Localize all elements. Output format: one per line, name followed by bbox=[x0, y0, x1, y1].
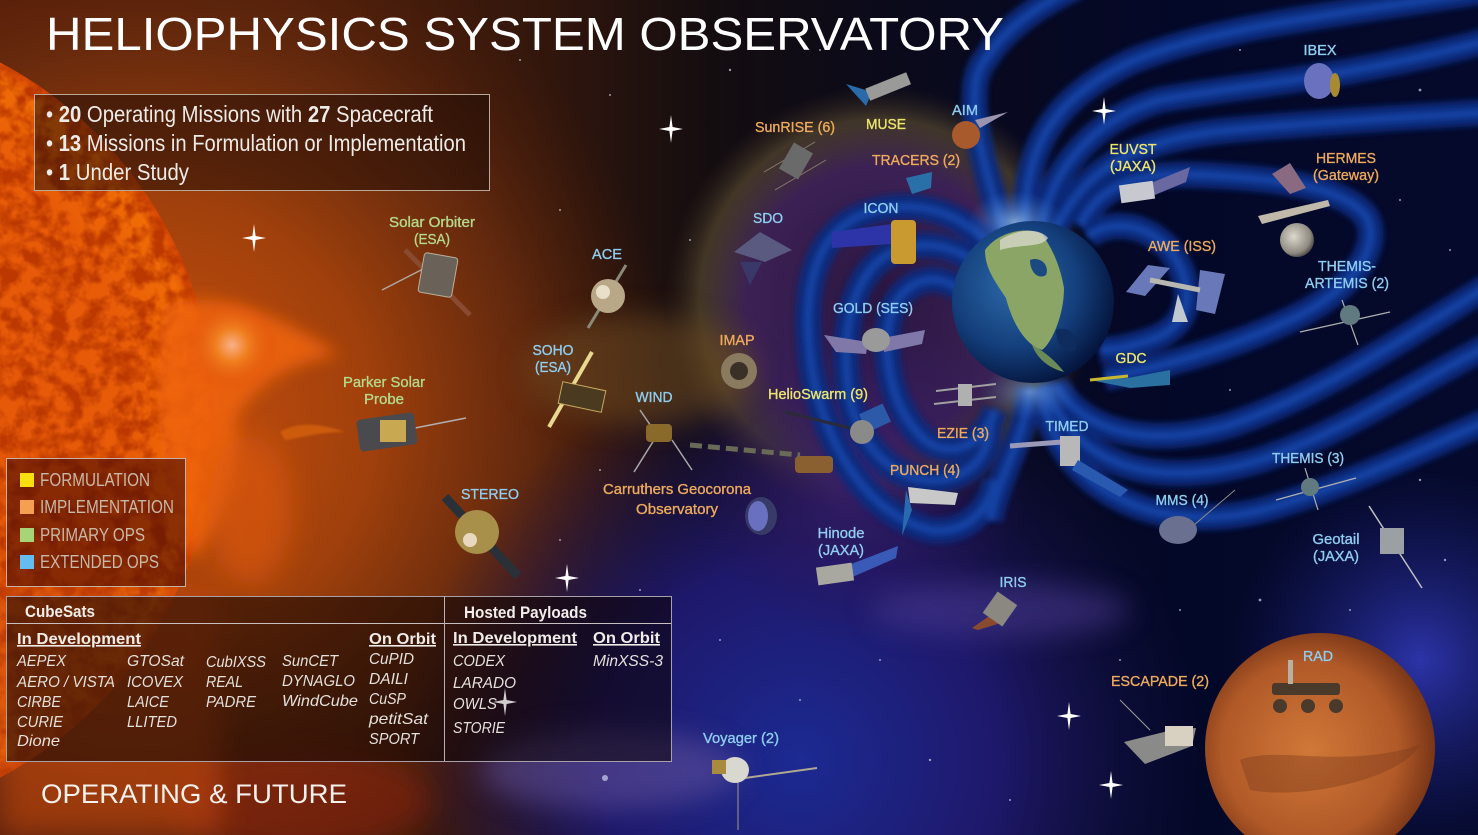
list: hosted in development: CODEX bbox=[453, 653, 506, 670]
mars bbox=[1205, 633, 1435, 835]
label: THEMIS-ARTEMIS: ARTEMIS (2) bbox=[1305, 275, 1389, 292]
label: THEMIS-ARTEMIS: THEMIS- bbox=[1318, 258, 1376, 275]
list: cubesats on orbit: petitSat bbox=[368, 711, 429, 728]
list: cubesats column 2: LLITED bbox=[127, 714, 177, 731]
label: ESCAPADE: ESCAPADE (2) bbox=[1111, 673, 1209, 690]
legend: formulation: FORMULATION bbox=[40, 470, 150, 490]
label: Geotail bbox=[1312, 531, 1360, 565]
sun with surface texture and flare bbox=[0, 15, 345, 835]
list: hosted in development bbox=[453, 653, 516, 737]
stars bbox=[242, 49, 1451, 801]
spacecraft: Parker Solar Probe bbox=[356, 412, 466, 452]
panel: status legend bbox=[6, 458, 186, 586]
spacecraft: SunRISE bbox=[764, 142, 826, 190]
label: EUVST: EUVST bbox=[1110, 141, 1156, 158]
spacecraft: Solar Orbiter bbox=[382, 250, 470, 315]
label: EUVST: (JAXA) bbox=[1110, 158, 1156, 175]
list: cubesats on orbit: SPORT bbox=[369, 731, 420, 748]
magnetosphere field lines bbox=[808, 0, 1478, 531]
list: cubesats on orbit bbox=[368, 651, 429, 748]
legend: extended ops: EXTENDED OPS bbox=[40, 552, 159, 572]
panel: cubesats and hosted payloads table bbox=[6, 596, 672, 762]
spacecraft: WIND bbox=[634, 410, 692, 472]
label: TIMED: TIMED bbox=[1046, 418, 1089, 435]
aurora glow at earth poles bbox=[967, 190, 1080, 420]
spacecraft: Hinode bbox=[816, 546, 898, 585]
panel: mission counts bbox=[34, 94, 490, 190]
heading: cubesats on orbit: On Orbit bbox=[369, 631, 437, 648]
list: hosted in development: STORIE bbox=[453, 720, 505, 737]
label: IMAP: IMAP bbox=[720, 332, 754, 349]
label: Geotail: (JAXA) bbox=[1313, 548, 1359, 565]
label: Carruthers Geocorona Observatory bbox=[603, 481, 752, 518]
list: cubesats on orbit: DAILI bbox=[369, 671, 409, 688]
label: Parker Solar Probe bbox=[343, 374, 425, 408]
list: cubesats column 3: PADRE bbox=[206, 694, 256, 711]
list: cubesats column 4: WindCube bbox=[282, 693, 358, 710]
label: Parker Solar Probe: Parker Solar bbox=[343, 374, 425, 391]
spacecraft: IMAP bbox=[721, 353, 757, 389]
spacecraft: THEMIS-ARTEMIS bbox=[1300, 300, 1390, 345]
label: SOHO: (ESA) bbox=[535, 359, 571, 376]
spacecraft: STEREO bbox=[445, 497, 518, 576]
spacecraft: Voyager bbox=[712, 757, 817, 830]
spacecraft: TIMED bbox=[1010, 436, 1128, 497]
title: HELIOPHYSICS SYSTEM OBSERVATORY bbox=[46, 8, 1004, 60]
spacecraft: MUSE bbox=[846, 72, 911, 106]
label: HERMES: HERMES bbox=[1316, 150, 1376, 167]
list: hosted on orbit: MinXSS-3 bbox=[593, 653, 663, 670]
label: EZIE: EZIE (3) bbox=[937, 425, 989, 442]
label: THEMIS-ARTEMIS bbox=[1305, 258, 1389, 292]
spacecraft: IRIS bbox=[972, 591, 1017, 630]
label: HERMES bbox=[1313, 150, 1379, 184]
label: AIM: AIM bbox=[952, 102, 978, 119]
label: IRIS: IRIS bbox=[1000, 574, 1026, 591]
list: hosted in development: OWLS bbox=[453, 696, 497, 713]
spacecraft: GOLD bbox=[824, 328, 925, 354]
label: AWE: AWE (ISS) bbox=[1148, 238, 1216, 255]
label: Carruthers Geocorona Observatory: Observatory bbox=[636, 501, 718, 518]
spacecraft: MMS bbox=[1159, 490, 1235, 544]
label: Carruthers Geocorona Observatory: Carruthers Geocorona bbox=[603, 481, 752, 498]
text: formulation missions: • 13 Missions in Formulation or Implementation bbox=[46, 130, 466, 156]
label: PUNCH: PUNCH (4) bbox=[890, 462, 960, 479]
label: RAD: RAD bbox=[1303, 648, 1333, 665]
list: cubesats column 1: CIRBE bbox=[17, 694, 61, 711]
footer label: OPERATING & FUTURE bbox=[41, 779, 347, 809]
label: MMS: MMS (4) bbox=[1156, 492, 1208, 509]
list: cubesats column 2: ICOVEX bbox=[127, 674, 184, 691]
label: ACE: ACE bbox=[592, 246, 622, 263]
label: Geotail: Geotail bbox=[1312, 531, 1360, 548]
label: SunRISE: SunRISE (6) bbox=[755, 119, 835, 136]
list: hosted in development: LARADO bbox=[453, 675, 516, 692]
spacecraft: EUVST bbox=[1119, 167, 1190, 203]
list: cubesats column 3: CubIXSS bbox=[206, 654, 266, 671]
label: HERMES: (Gateway) bbox=[1313, 167, 1379, 184]
spacecraft: RAD on rover bbox=[1272, 660, 1343, 713]
legend: primary ops: PRIMARY OPS bbox=[40, 525, 145, 545]
spacecraft: SOHO bbox=[549, 352, 606, 427]
text: operating missions: • 20 Operating Missions with 27 Spacecraft bbox=[46, 101, 434, 127]
label: Solar Orbiter: (ESA) bbox=[414, 231, 450, 248]
earth bbox=[952, 221, 1114, 383]
label: GOLD: GOLD (SES) bbox=[833, 300, 913, 317]
label: Hinode bbox=[818, 525, 864, 559]
spacecraft: ACE bbox=[588, 265, 626, 328]
label: ICON: ICON bbox=[864, 200, 898, 217]
moon bbox=[1280, 223, 1314, 257]
label: SOHO: SOHO bbox=[532, 342, 574, 359]
label: Hinode: (JAXA) bbox=[818, 542, 864, 559]
label: HelioSwarm: HelioSwarm (9) bbox=[768, 386, 868, 403]
spacecraft: Geotail bbox=[1369, 506, 1422, 588]
text: under study: • 1 Under Study bbox=[46, 159, 189, 185]
list: cubesats column 4 bbox=[282, 653, 358, 710]
spacecraft: HelioSwarm bbox=[690, 403, 891, 473]
list: cubesats column 2: GTOSat bbox=[127, 653, 185, 670]
label: EUVST bbox=[1110, 141, 1156, 175]
label: STEREO: STEREO bbox=[461, 486, 519, 503]
label: GDC: GDC bbox=[1116, 350, 1147, 367]
list: cubesats column 1: AERO / VISTA bbox=[16, 674, 115, 691]
label: Solar Orbiter: Solar Orbiter bbox=[389, 214, 475, 231]
list: cubesats column 3: REAL bbox=[206, 674, 243, 691]
label: Parker Solar Probe: Probe bbox=[364, 391, 404, 408]
spacecraft: IBEX bbox=[1304, 63, 1340, 99]
list: cubesats column 2: LAICE bbox=[127, 694, 169, 711]
list: cubesats column 3 bbox=[206, 654, 266, 711]
label: IBEX: IBEX bbox=[1304, 42, 1336, 59]
legend: implementation: IMPLEMENTATION bbox=[40, 497, 174, 517]
spacecraft: TRACERS bbox=[906, 172, 932, 194]
spacecraft: EZIE bbox=[934, 384, 996, 406]
spacecraft: ESCAPADE bbox=[1120, 700, 1196, 764]
list: cubesats column 4: SunCET bbox=[282, 653, 339, 670]
spacecraft: THEMIS bbox=[1276, 468, 1356, 510]
spacecraft: Carruthers bbox=[745, 497, 777, 535]
list: cubesats column 1 bbox=[16, 653, 115, 750]
heading: hosted in development: In Development bbox=[453, 630, 578, 647]
heading: cubesats in development: In Development bbox=[17, 631, 142, 648]
spacecraft: AWE on ISS bbox=[1126, 265, 1225, 322]
label: WIND: WIND bbox=[636, 389, 673, 406]
list: cubesats column 2 bbox=[127, 653, 185, 731]
label: Hinode: Hinode bbox=[818, 525, 864, 542]
label: TRACERS: TRACERS (2) bbox=[872, 152, 960, 169]
list: cubesats column 1: Dione bbox=[17, 733, 60, 750]
list: cubesats column 4: DYNAGLO bbox=[282, 673, 355, 690]
star over table bbox=[493, 688, 517, 716]
label: Solar Orbiter bbox=[389, 214, 475, 248]
label: MUSE: MUSE bbox=[866, 116, 906, 133]
heading: hosted on orbit: On Orbit bbox=[593, 630, 661, 647]
list: cubesats column 1: AEPEX bbox=[16, 653, 67, 670]
heading: hosted payloads: Hosted Payloads bbox=[464, 604, 587, 622]
spacecraft: GDC bbox=[1090, 370, 1170, 388]
heading: cubesats: CubeSats bbox=[25, 603, 95, 621]
list: cubesats on orbit: CuSP bbox=[369, 691, 406, 708]
label: THEMIS: THEMIS (3) bbox=[1272, 450, 1344, 467]
spacecraft: PUNCH bbox=[902, 487, 958, 536]
label: Voyager: Voyager (2) bbox=[703, 730, 779, 747]
label: SOHO bbox=[532, 342, 574, 376]
label: SDO: SDO bbox=[753, 210, 783, 227]
spacecraft: ICON bbox=[832, 220, 916, 264]
spacecraft: HERMES on Gateway bbox=[1258, 163, 1330, 224]
spacecraft: SDO bbox=[734, 232, 792, 285]
list: cubesats on orbit: CuPID bbox=[369, 651, 414, 668]
list: cubesats column 1: CURIE bbox=[17, 714, 63, 731]
spacecraft: AIM bbox=[952, 112, 1008, 149]
